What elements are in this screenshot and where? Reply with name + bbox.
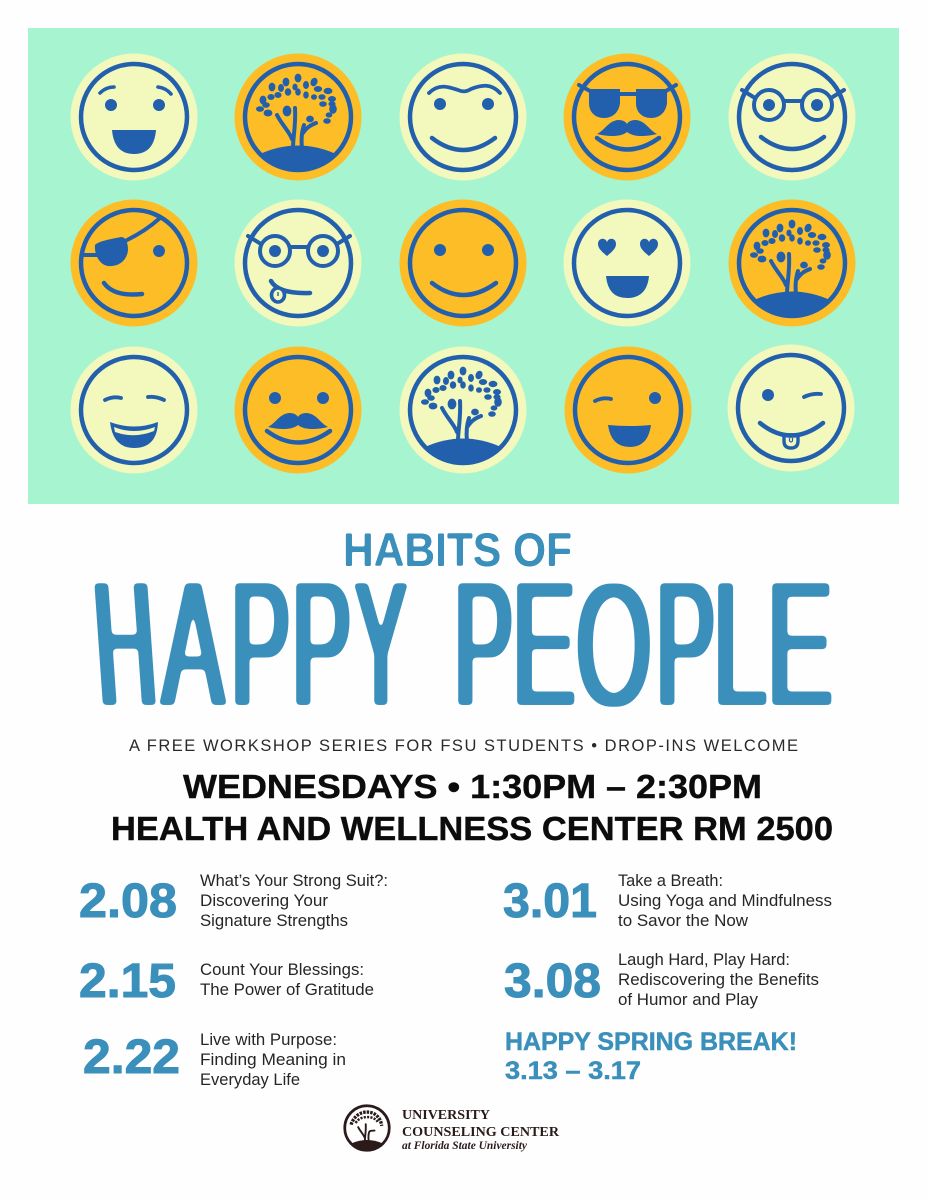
title: happy people: P	[656, 545, 715, 743]
title: happy people: P	[231, 545, 290, 743]
icon: logo tree	[345, 1106, 389, 1150]
subtitle: A FREE WORKSHOP SERIES FOR FSU STUDENTS • DROP-INS WELCOME	[129, 737, 798, 755]
session 2.22: Finding Meaning in	[200, 1051, 346, 1069]
session 3.08	[504, 951, 819, 1009]
session 2.08: Signature Strengths	[200, 912, 348, 930]
title: happy people: E	[512, 547, 575, 744]
session 3.08: Rediscovering the Benefits	[618, 971, 819, 989]
title: happy people: P	[292, 545, 351, 743]
icon: tree on cream	[400, 346, 526, 474]
schedule: day and time: WEDNESDAYS • 1:30PM – 2:30PM	[183, 769, 762, 806]
callout: spring break	[505, 1028, 797, 1085]
logo: university counseling center	[345, 1106, 560, 1152]
session 3.08: of Humor and Play	[618, 991, 759, 1009]
logo: university counseling center: UNIVERSITY	[402, 1108, 490, 1123]
icon: round glasses smile	[728, 54, 856, 180]
session 2.08: What’s Your Strong Suit?:	[200, 872, 388, 890]
title: happy people: L	[713, 546, 767, 744]
session 2.22: 2.22	[83, 1031, 180, 1084]
session 2.22: Everyday Life	[200, 1071, 300, 1089]
session 2.22: Live with Purpose:	[200, 1031, 337, 1049]
icon: open smile with raised brows	[70, 54, 198, 180]
icon: eye patch	[70, 200, 198, 326]
session 2.15: 2.15	[79, 955, 176, 1008]
icon: tree on orange	[234, 54, 362, 180]
session 2.22	[83, 1031, 346, 1089]
title: happy people: A	[162, 545, 224, 743]
title: happy people	[88, 544, 833, 744]
session 3.01: Take a Breath:	[618, 872, 723, 890]
icon: glasses and tongue	[234, 200, 362, 326]
session 3.08: Laugh Hard, Play Hard:	[618, 951, 790, 969]
title: happy people: O	[576, 547, 652, 742]
logo: university counseling center: COUNSELING CENTER	[402, 1125, 560, 1140]
session 2.08: Discovering Your	[200, 892, 329, 910]
session 2.08	[79, 872, 388, 930]
title: happy people: Y	[355, 544, 407, 743]
title: happy people: H	[88, 546, 162, 743]
session 2.15: Count Your Blessings:	[200, 961, 364, 979]
icon: winking open smile	[564, 346, 692, 474]
session 2.15	[79, 955, 374, 1008]
callout: spring break: HAPPY SPRING BREAK!	[505, 1028, 797, 1056]
session 3.01: 3.01	[503, 875, 597, 928]
icon: classic smile on orange	[400, 200, 526, 326]
panel: emoji grid	[28, 28, 899, 504]
icon: sunglasses and moustache	[564, 54, 690, 180]
session 3.08: 3.08	[504, 955, 601, 1008]
icon: tree on orange	[728, 200, 856, 326]
icon: heart eyes	[564, 200, 690, 326]
title: happy people: E	[767, 545, 833, 743]
icon: moustache face	[234, 346, 362, 474]
session 3.01: to Savor the Now	[618, 912, 748, 930]
heading: habits of: HABITS OF	[343, 523, 572, 576]
icon: wavy brow smile	[400, 54, 526, 180]
session 3.01	[503, 872, 832, 930]
logo: university counseling center: at Florida State University	[402, 1140, 528, 1152]
session 2.15: The Power of Gratitude	[200, 981, 374, 999]
icon: laughing face	[70, 346, 198, 474]
session 2.08: 2.08	[79, 875, 177, 928]
schedule: location: HEALTH AND WELLNESS CENTER RM 2500	[111, 811, 833, 848]
session 3.01: Using Yoga and Mindfulness	[618, 892, 832, 910]
icon: wink with tongue	[728, 344, 854, 472]
title: happy people: P	[454, 545, 513, 743]
callout: spring break: 3.13 – 3.17	[505, 1057, 641, 1085]
